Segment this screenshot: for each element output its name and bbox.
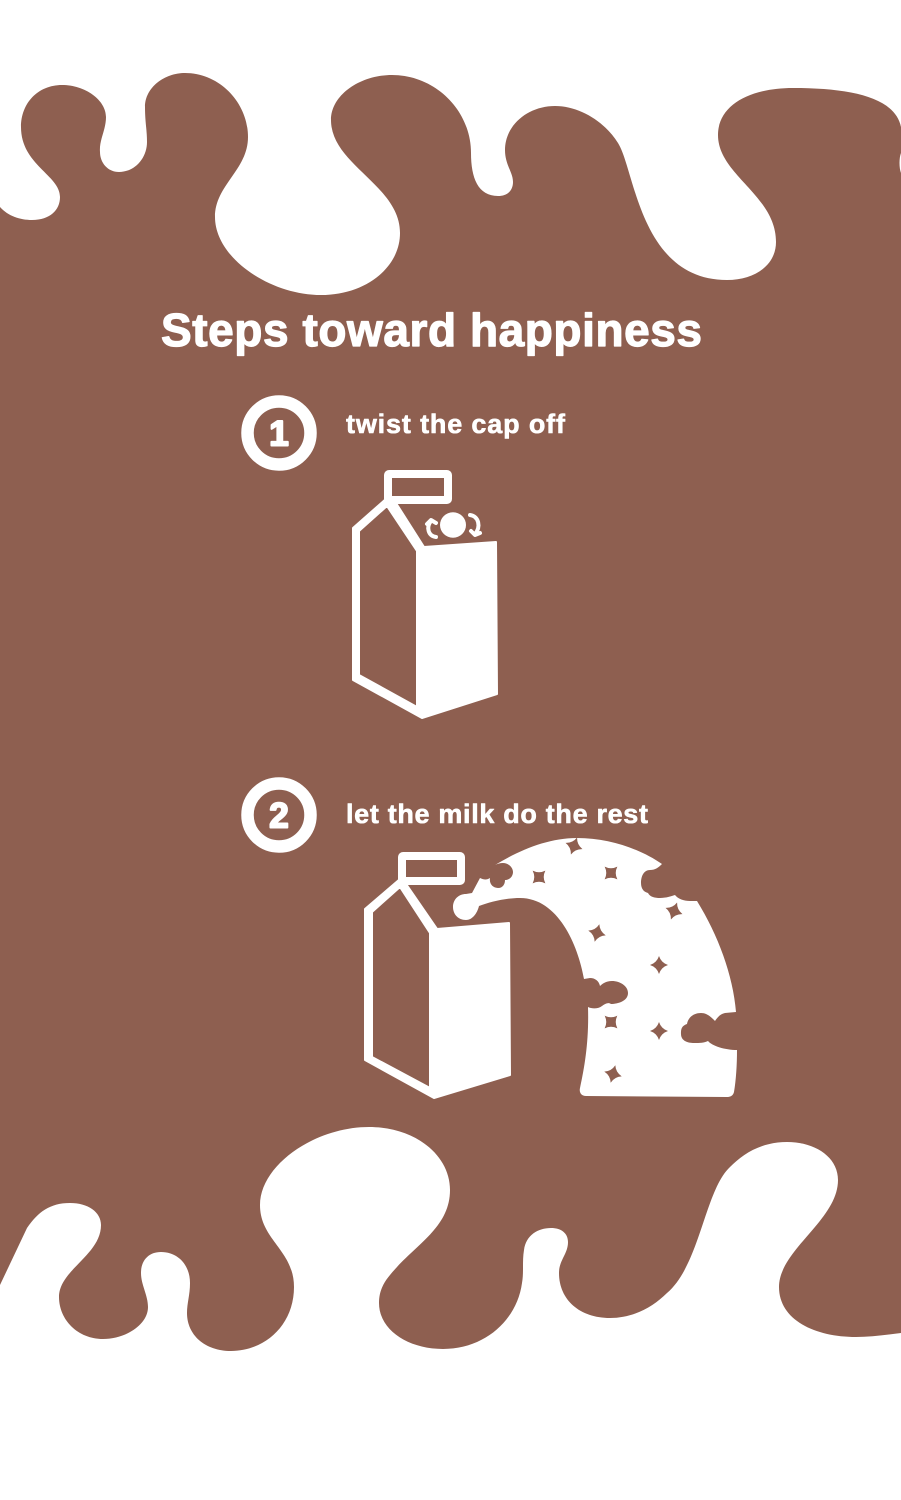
step 1 label: twist the cap off bbox=[346, 409, 566, 439]
icon: milk wave with foam and sparkles bbox=[453, 834, 737, 1097]
title: Steps toward happiness bbox=[161, 304, 702, 356]
step 2 label: let the milk do the rest bbox=[346, 799, 648, 829]
step 2 number badge bbox=[248, 784, 310, 846]
icon: twist arrows bbox=[427, 515, 480, 537]
icon: pouring milk carton bbox=[365, 856, 510, 1098]
step 1 number badge: 1 bbox=[269, 414, 289, 454]
step 2 number badge: 2 bbox=[269, 796, 289, 836]
step 2 group bbox=[248, 784, 737, 1098]
step 1 group bbox=[248, 402, 566, 718]
step 1 number badge bbox=[248, 402, 310, 464]
icon: closed milk carton with cap bbox=[353, 474, 497, 718]
icon: cap bbox=[440, 512, 466, 538]
sparkles bbox=[526, 834, 686, 1085]
